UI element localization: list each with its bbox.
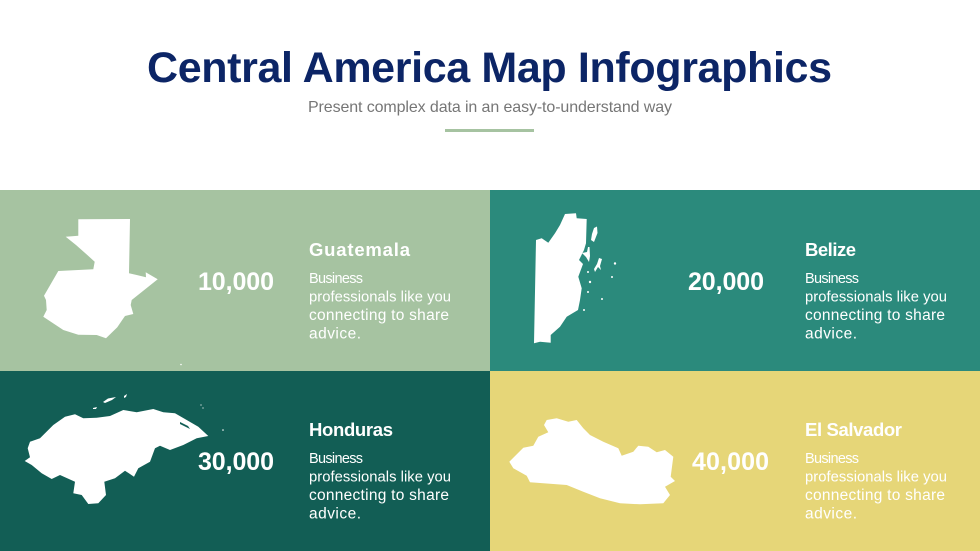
value: 20,000: 20,000 [688,268,764,296]
description: Guatemala: advice. [309,326,361,342]
description: Honduras: professionals like you [309,470,451,486]
map: Belize [534,213,616,343]
description: Belize: professionals like you [805,290,947,306]
value: 10,000: 10,000 [198,268,274,296]
heading: Guatemala: Guatemala [309,239,411,260]
heading: Belize: Belize [805,239,856,260]
value: 40,000: 40,000 [692,448,769,476]
description: Guatemala: Business [309,271,363,287]
map: Honduras [25,394,224,504]
panel: Belize [490,190,980,371]
panel: Honduras [0,371,490,551]
title underline [445,129,534,132]
panel: El Salvador [490,371,980,551]
description: Guatemala: connecting to share [309,307,449,324]
description: Guatemala: professionals like you [309,290,451,306]
description: Belize [805,271,947,342]
description: Belize: advice. [805,326,857,342]
description: Honduras: Business [309,451,363,467]
subtitle: Present complex data in an easy-to-understand way [308,99,672,116]
description: Honduras: advice. [309,506,361,522]
heading: El Salvador: El Salvador [805,419,902,440]
heading: Honduras: Honduras [309,419,393,440]
title: Central America Map Infographics [147,44,832,92]
description: El Salvador: connecting to share [805,487,945,504]
description: Guatemala [309,271,451,342]
map: Guatemala [43,219,158,338]
description: Honduras: connecting to share [309,487,449,504]
description: El Salvador [805,451,947,522]
description: El Salvador: Business [805,451,859,467]
panel: Guatemala [0,190,490,371]
map: El Salvador [509,418,675,504]
description: Honduras [309,451,451,522]
description: Belize: Business [805,271,859,287]
description: El Salvador: professionals like you [805,470,947,486]
speck [180,364,182,365]
description: Belize: connecting to share [805,307,945,324]
description: El Salvador: advice. [805,506,857,522]
value: 30,000: 30,000 [198,448,274,476]
